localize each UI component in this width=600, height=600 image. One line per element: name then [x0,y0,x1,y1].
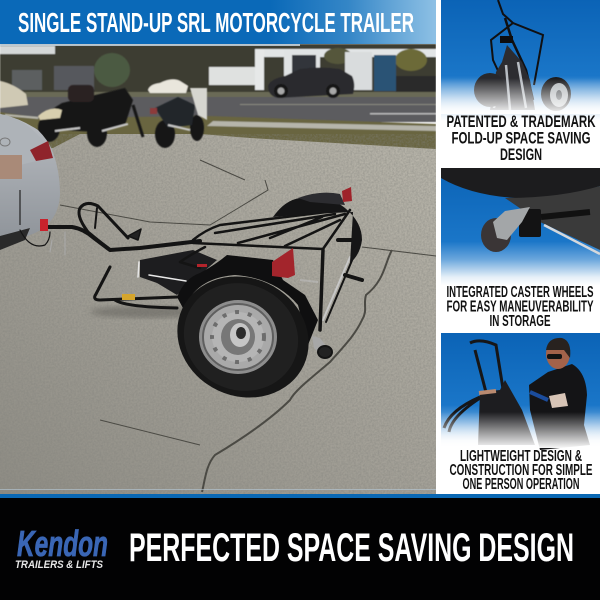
caption [446,113,596,164]
deck [140,250,217,295]
near tire [177,276,309,398]
photo: trailer in parking lot [0,44,436,494]
right edge trim [0,489,436,490]
heading banner [0,0,436,46]
logo: Kendon Trailers & Lifts: TRAILERS & LIFTS [15,559,104,571]
near tail light [272,248,295,278]
caption [446,284,594,330]
logo: Kendon Trailers & Lifts [15,523,108,571]
silver car rear [0,114,60,250]
man with trailer image [441,338,600,450]
caster wheel image [441,168,600,254]
trailer frame and deck [20,203,362,330]
background scene: trees, buildings and road [0,44,436,150]
near fender and body [177,255,318,345]
folding leg [95,267,177,300]
footer band [0,494,600,600]
panel: one person operation [441,333,600,493]
trailer shadow [90,306,210,318]
caption: DESIGN [500,146,542,164]
front hoop [79,203,128,250]
logo: Kendon Trailers & Lifts: Kendon [17,523,108,564]
pavement cracks [60,160,436,492]
caption: IN STORAGE [490,313,550,330]
hitch tongue [46,227,200,250]
folded trailer image [441,0,600,114]
motorcycles [38,85,207,148]
far tail light [342,187,352,202]
loading ramp [192,213,328,240]
far wheel and fender [273,197,362,263]
chrome rim [199,300,277,374]
panel: fold-up design [441,0,600,168]
concrete texture [0,134,436,494]
caption [450,448,593,493]
caster wheel [312,336,332,358]
panel: caster wheels [441,168,600,331]
background cars [268,68,354,98]
concrete driveway [0,134,436,494]
